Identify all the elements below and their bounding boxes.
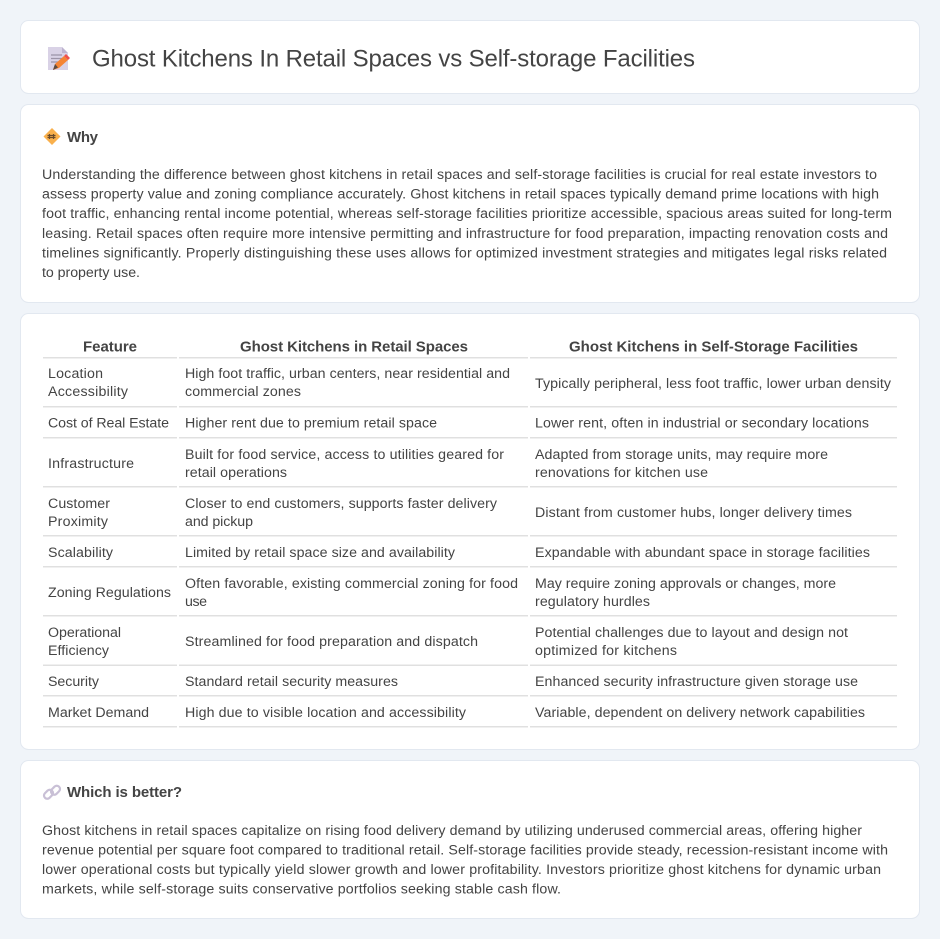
row: infrastructure: Adapted from storage units, may require more	[535, 447, 828, 463]
table header	[43, 338, 897, 358]
panel: title header	[20, 20, 920, 94]
text block: which is better paragraph: lower operational costs but typically yield slower growth and lower profitability. Investors prioritize ghost kitchens for dynamic urban	[42, 862, 881, 878]
row: zoning regulations	[43, 576, 897, 616]
text block: why paragraph: foot traffic, enhancing rental income potential, whereas self-storage facilities prioritize accessible, spacious areas suited for long-term	[42, 206, 892, 222]
panel: which is better	[20, 760, 920, 918]
panel: why	[20, 104, 920, 302]
row: infrastructure	[43, 447, 897, 488]
row: infrastructure: retail operations	[185, 465, 287, 481]
row: operational efficiency: Efficiency	[48, 643, 110, 659]
icon: document with pencil	[48, 47, 70, 70]
row: market demand: High due to visible location and accessibility	[185, 705, 467, 721]
row: location accessibility: commercial zones	[185, 384, 301, 400]
title: Ghost Kitchens In Retail Spaces vs Self-storage Facilities	[92, 46, 695, 72]
row: market demand	[43, 705, 897, 728]
row: zoning regulations: Zoning Regulations	[48, 585, 171, 601]
row: customer proximity: Proximity	[48, 514, 109, 530]
row: cost of real estate	[43, 416, 897, 438]
table header: Ghost Kitchens in Self-Storage Facilities	[569, 338, 858, 356]
row: zoning regulations: regulatory hurdles	[535, 594, 650, 610]
row: operational efficiency: Operational	[48, 625, 121, 641]
row: security: Security	[48, 674, 100, 690]
panel: comparison table	[20, 314, 920, 750]
row: scalability: Scalability	[48, 545, 114, 561]
heading: why: Why	[67, 129, 99, 146]
row: infrastructure: renovations for kitchen use	[535, 465, 708, 481]
text block: why paragraph: to property use.	[42, 265, 140, 281]
row: cost of real estate: Lower rent, often in industrial or secondary locations	[535, 416, 869, 432]
row: customer proximity: Distant from customer hubs, longer delivery times	[535, 505, 852, 521]
row: infrastructure: Built for food service, access to utilities geared for	[185, 447, 504, 463]
row: location accessibility: Location	[48, 366, 103, 382]
row: security	[43, 674, 897, 696]
table header: Feature	[83, 338, 137, 356]
row: zoning regulations: use	[185, 594, 207, 610]
row: infrastructure: Infrastructure	[48, 456, 134, 472]
row: scalability	[43, 545, 897, 568]
row: location accessibility: Accessibility	[48, 384, 129, 400]
row: cost of real estate: Higher rent due to premium retail space	[185, 416, 437, 432]
text block: which is better paragraph: markets, while self-storage suits conservative portfolios seeking stable cash flow.	[42, 882, 561, 898]
row: cost of real estate: Cost of Real Estate	[48, 416, 169, 432]
row: scalability: Expandable with abundant space in storage facilities	[535, 545, 870, 561]
row: customer proximity: and pickup	[185, 514, 253, 530]
row: scalability: Limited by retail space size and availability	[185, 545, 456, 561]
row: location accessibility: Typically peripheral, less foot traffic, lower urban density	[535, 376, 892, 392]
row: customer proximity: Closer to end customers, supports faster delivery	[185, 496, 498, 512]
heading: which is better: Which is better?	[67, 784, 182, 801]
row: location accessibility	[43, 366, 897, 408]
row: operational efficiency: optimized for kitchens	[535, 643, 677, 659]
row: zoning regulations: Often favorable, existing commercial zoning for food	[185, 576, 518, 592]
row: customer proximity: Customer	[48, 496, 110, 512]
text block: why paragraph: Understanding the difference between ghost kitchens in retail spaces and self-storage facilities is crucial for real estate investors to	[42, 167, 877, 183]
row: security: Enhanced security infrastructure given storage use	[535, 674, 858, 690]
row: operational efficiency: Streamlined for food preparation and dispatch	[185, 634, 478, 650]
row: market demand: Variable, dependent on delivery network capabilities	[535, 705, 865, 721]
text block: which is better paragraph: Ghost kitchens in retail spaces capitalize on rising food delivery demand by utilizing underused commercial areas, offering higher	[42, 823, 862, 839]
icon: diamond sign	[44, 128, 60, 145]
row: operational efficiency	[43, 625, 897, 666]
text block: which is better paragraph: revenue potential per square foot compared to traditional retail. Self-storage facilities provide steady, recession-resistant income with	[42, 842, 888, 858]
table header: Ghost Kitchens in Retail Spaces	[240, 338, 468, 356]
text block: why paragraph: timelines significantly. Properly distinguishing these uses allows for optimized investment strategies and mitigates legal risks related	[42, 245, 887, 261]
row: security: Standard retail security measures	[185, 674, 398, 690]
row: operational efficiency: Potential challenges due to layout and design not	[535, 625, 848, 641]
row: market demand: Market Demand	[48, 705, 149, 721]
text block: why paragraph: assess property value and zoning compliance accurately. Ghost kitchens in retail spaces typically demand prime locations with high	[42, 187, 879, 203]
row: zoning regulations: May require zoning approvals or changes, more	[535, 576, 836, 592]
text block: which is better paragraph	[42, 823, 888, 898]
text block: why paragraph	[42, 167, 892, 281]
row: customer proximity	[43, 496, 897, 536]
text block: why paragraph: leasing. Retail spaces often require more intensive permitting and infrastructure for food preparation, impacting renovation costs and	[42, 226, 888, 242]
row: location accessibility: High foot traffic, urban centers, near residential and	[185, 366, 510, 382]
icon: chain link	[43, 784, 61, 800]
